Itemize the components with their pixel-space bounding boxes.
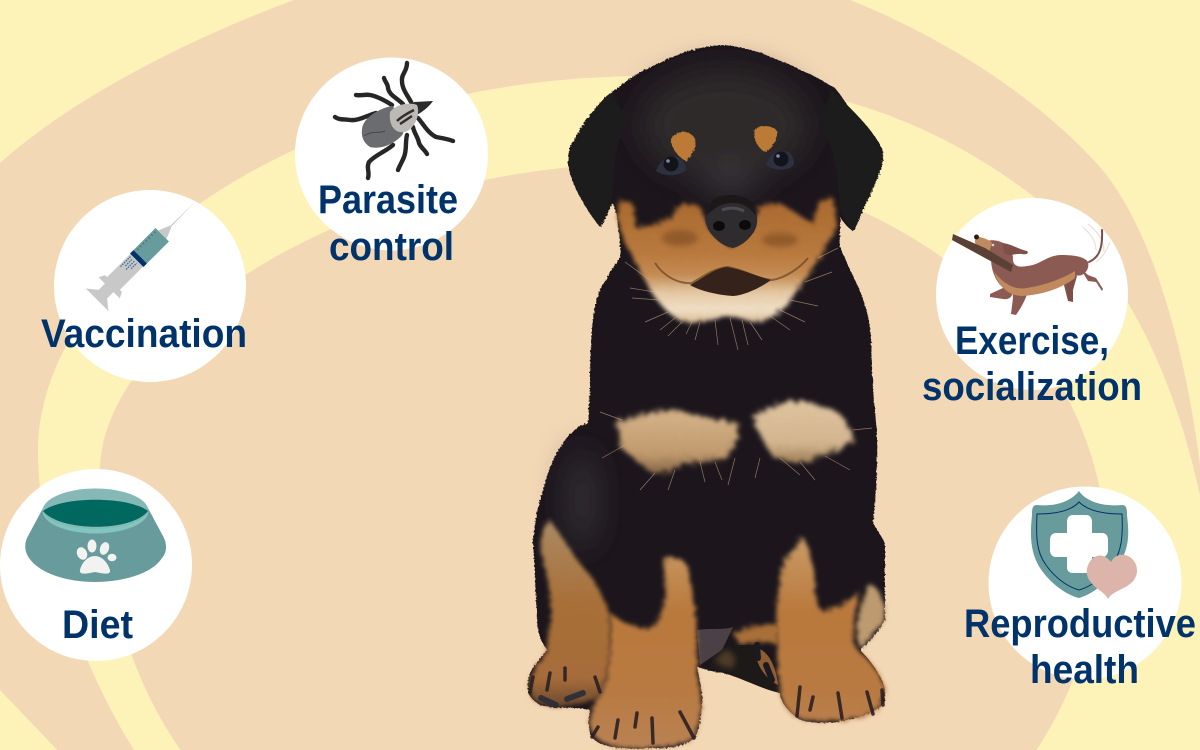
diet white circle	[0, 469, 192, 661]
panel: parasite control	[295, 58, 488, 269]
exercise label: socialization	[922, 365, 1142, 409]
mouth and chin	[655, 258, 808, 296]
reproductive label	[964, 602, 1196, 692]
icon: syringe	[86, 191, 206, 311]
reproductive label: health	[1030, 648, 1139, 692]
panel: diet	[0, 469, 192, 661]
chest left tan patch	[617, 410, 740, 473]
vaccination white circle	[54, 190, 246, 382]
icon: running dachshund with stick	[952, 224, 1110, 315]
nose	[705, 195, 757, 248]
ears	[568, 90, 883, 231]
vaccination label: Vaccination	[41, 312, 247, 356]
exercise label	[922, 319, 1142, 409]
muzzle and cheeks	[617, 197, 837, 322]
eyebrow tan spots	[671, 126, 777, 161]
front left leg	[590, 558, 702, 748]
puppy: rottweiler photo illustration	[528, 45, 885, 749]
eyes	[656, 151, 794, 175]
rear right haunch	[857, 583, 885, 648]
reproductive white circle	[988, 486, 1182, 680]
parasite label: control	[329, 225, 454, 269]
icon: tick	[335, 63, 453, 178]
parasite white circle	[295, 58, 488, 250]
exercise white circle	[936, 198, 1128, 390]
front right leg	[776, 537, 885, 722]
muzzle dark shading	[662, 230, 798, 247]
diet label: Diet	[62, 603, 133, 647]
fur sheen on head and flank	[570, 70, 810, 550]
icon: dog bowl	[25, 488, 166, 582]
parasite label	[318, 178, 458, 269]
chest right tan patch	[753, 400, 853, 461]
panel: reproductive health	[964, 486, 1196, 692]
rear left haunch	[530, 520, 610, 706]
panel: vaccination	[41, 190, 247, 382]
belly and hind foot	[697, 624, 780, 693]
icon: shield with cross and heart	[1031, 491, 1137, 599]
claws and toe gaps	[530, 668, 883, 743]
parasite label: Parasite	[318, 178, 458, 222]
ruff whiskers	[600, 248, 872, 490]
puppy silhouette	[528, 45, 885, 749]
exercise label: Exercise,	[955, 319, 1109, 363]
panel: exercise and socialization	[922, 198, 1142, 409]
